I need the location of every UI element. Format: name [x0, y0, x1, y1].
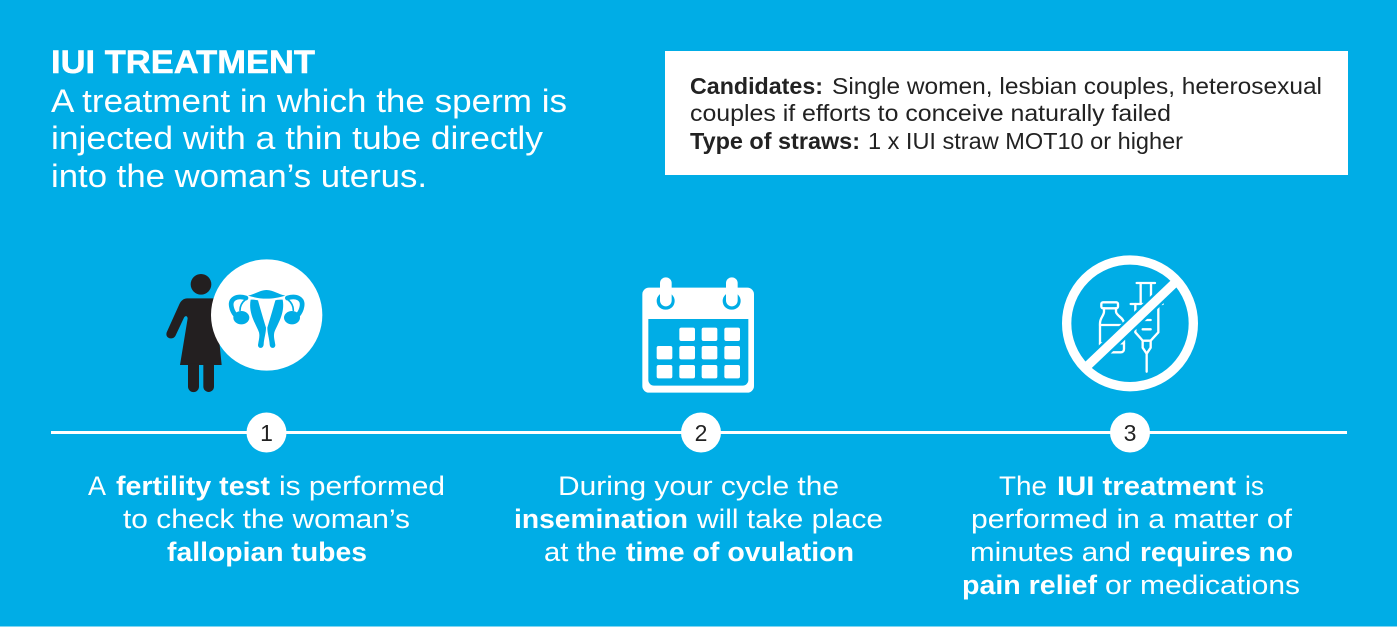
step 3 text: pain relief	[962, 570, 1098, 600]
step number 2: 2	[695, 420, 707, 446]
step number 3: 3	[1124, 420, 1136, 446]
step 3 text: is	[1245, 471, 1264, 501]
step 2 text: insemination	[514, 504, 688, 534]
step 1 text: fertility test	[116, 471, 270, 501]
step 2 text: During your cycle the	[558, 471, 839, 501]
step 3 text: minutes and	[970, 537, 1131, 567]
step number 1	[246, 412, 286, 452]
step 3 text: The	[999, 471, 1047, 501]
step 3 text	[962, 471, 1300, 600]
intro text: A treatment in which the sperm is	[51, 83, 567, 119]
timeline	[51, 412, 1347, 452]
step number 2	[681, 412, 721, 452]
step 2 text: time of ovulation	[626, 537, 854, 567]
intro text	[51, 83, 567, 194]
panel: candidates: couples if efforts to conceive naturally failed	[690, 100, 1171, 126]
panel: candidates: 1 x IUI straw MOT10 or higher	[868, 128, 1183, 154]
panel: candidates: Single women, lesbian couples, heterosexual	[832, 73, 1322, 99]
step number 1: 1	[260, 420, 273, 446]
step number 3	[1110, 412, 1150, 452]
icon: woman with uterus	[166, 259, 322, 392]
icon: no medication	[1067, 260, 1193, 387]
step 2 text: at the	[544, 537, 617, 567]
step 1 text: fallopian tubes	[167, 537, 367, 567]
intro text: injected with a thin tube directly	[51, 120, 543, 156]
step 3 text: performed in a matter of	[971, 504, 1293, 534]
step 2 text	[514, 471, 883, 567]
step 1 text	[88, 471, 445, 567]
uterus	[231, 290, 302, 348]
step 1 text: A	[88, 471, 106, 501]
panel: candidates: Type of straws:	[690, 128, 860, 154]
step 1 text: to check the woman’s	[123, 504, 410, 534]
panel: candidates	[665, 51, 1348, 175]
step 2 text: will take place	[696, 504, 883, 534]
intro text: into the woman’s uterus.	[51, 158, 427, 194]
icon: calendar	[642, 277, 754, 393]
panel: candidates: Candidates:	[690, 73, 823, 99]
step 1 text: is performed	[279, 471, 445, 501]
step 3 text: requires no	[1140, 537, 1293, 567]
title: IUI TREATMENT	[51, 44, 315, 80]
step 3 text: IUI treatment	[1057, 471, 1236, 501]
step 3 text: or medications	[1105, 570, 1300, 600]
